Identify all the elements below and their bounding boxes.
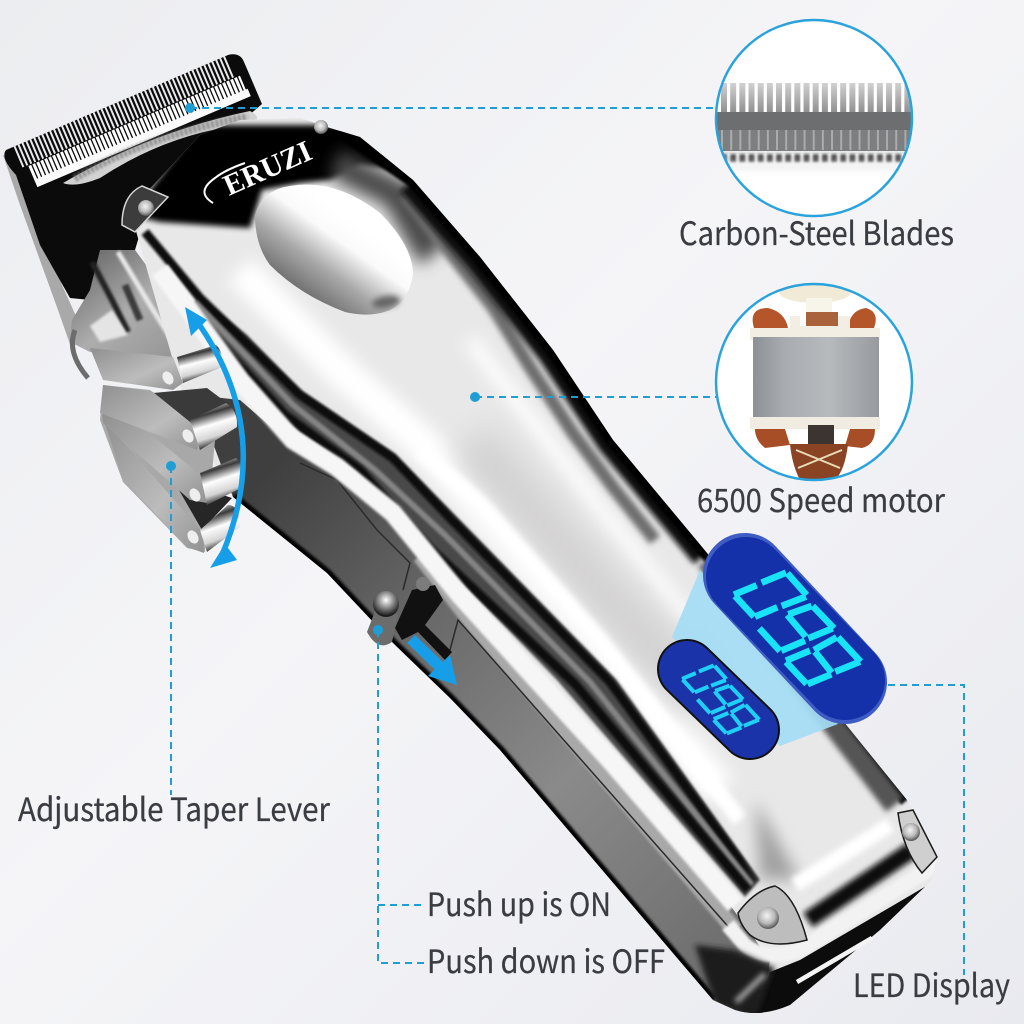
lever 3 (102, 413, 243, 505)
white strip above bundle (448, 470, 745, 824)
body base (136, 118, 932, 968)
screws (122, 120, 937, 944)
shaft (808, 425, 834, 444)
black end cap (750, 886, 926, 1013)
black top of body (130, 125, 400, 228)
label: Push down is OFF: Push down is OFF (427, 937, 665, 983)
bottom winding (790, 444, 848, 480)
blue double arrow for taper lever (185, 307, 243, 568)
callout: motor leader line (470, 392, 718, 402)
lever mechanism housing (70, 250, 205, 378)
label: 6500 Speed motor: 6500 Speed motor (697, 476, 946, 522)
dark bottom corner (695, 945, 775, 1020)
beam (672, 570, 838, 746)
soft grey next to rim below LED (707, 560, 895, 805)
enlarged digits (734, 573, 861, 684)
power switch (367, 577, 452, 660)
black lower rim (233, 497, 713, 1000)
white rim band (160, 270, 735, 905)
lever 1 (90, 345, 222, 390)
blade comb rows (18, 63, 251, 190)
blade teeth (721, 83, 916, 113)
label: LED Display: LED Display (853, 961, 1010, 1007)
oval silver window (255, 185, 413, 315)
label: Carbon-Steel Blades: Carbon-Steel Blades (679, 209, 954, 255)
switch panel thin line (300, 463, 740, 940)
white plastic caps (750, 316, 880, 340)
left silver edge of head (3, 155, 80, 350)
lever 4 (104, 420, 240, 553)
corner reflection (736, 974, 765, 1002)
clipper body (136, 118, 932, 1013)
white end rim (728, 862, 940, 955)
blade detail circle (716, 20, 916, 216)
label: Push up is ON: Push up is ON (427, 880, 611, 926)
ribbed blade guard (63, 111, 257, 185)
grey wash at lower face (755, 800, 800, 880)
small LED pill (682, 665, 759, 733)
adjustable taper levers (90, 345, 243, 553)
callout: switch leader lines (373, 625, 425, 963)
white highlight above end (795, 825, 890, 885)
charging slot (797, 938, 872, 982)
soft grey face centre (470, 440, 700, 700)
small digits (682, 665, 759, 733)
upper copper coils (753, 308, 788, 328)
steel core (753, 337, 879, 417)
dark stripe above end rim (808, 850, 912, 920)
upper highlight beside the right edge (470, 340, 690, 620)
callout: blades leader line (185, 103, 720, 113)
lever backing (100, 385, 215, 552)
blue arrow for power switch (411, 639, 457, 685)
black blade plate (4, 54, 262, 300)
lower copper coils (755, 429, 790, 448)
grey band near right edge (405, 195, 655, 540)
label: Adjustable Taper Lever: Adjustable Taper Lever (18, 785, 331, 831)
lever 2 (100, 385, 237, 450)
brand logo: ERUZI (218, 134, 317, 202)
motor detail circle (716, 281, 912, 480)
dark stripe bundle (145, 232, 760, 897)
black right rim (340, 130, 907, 800)
bright face highlights (240, 270, 720, 790)
enlarged LED pill (734, 573, 861, 684)
callout: lever leader line (166, 461, 176, 795)
upper lighter strip of side panel (420, 556, 735, 930)
LED display callout (672, 570, 861, 746)
grey falloff around the window (330, 150, 445, 265)
clipper head and blades (3, 54, 262, 378)
callout: LED leader line (888, 685, 964, 975)
dark soft right edge (413, 180, 707, 553)
lower side panel (195, 395, 770, 1024)
gear (779, 285, 851, 302)
